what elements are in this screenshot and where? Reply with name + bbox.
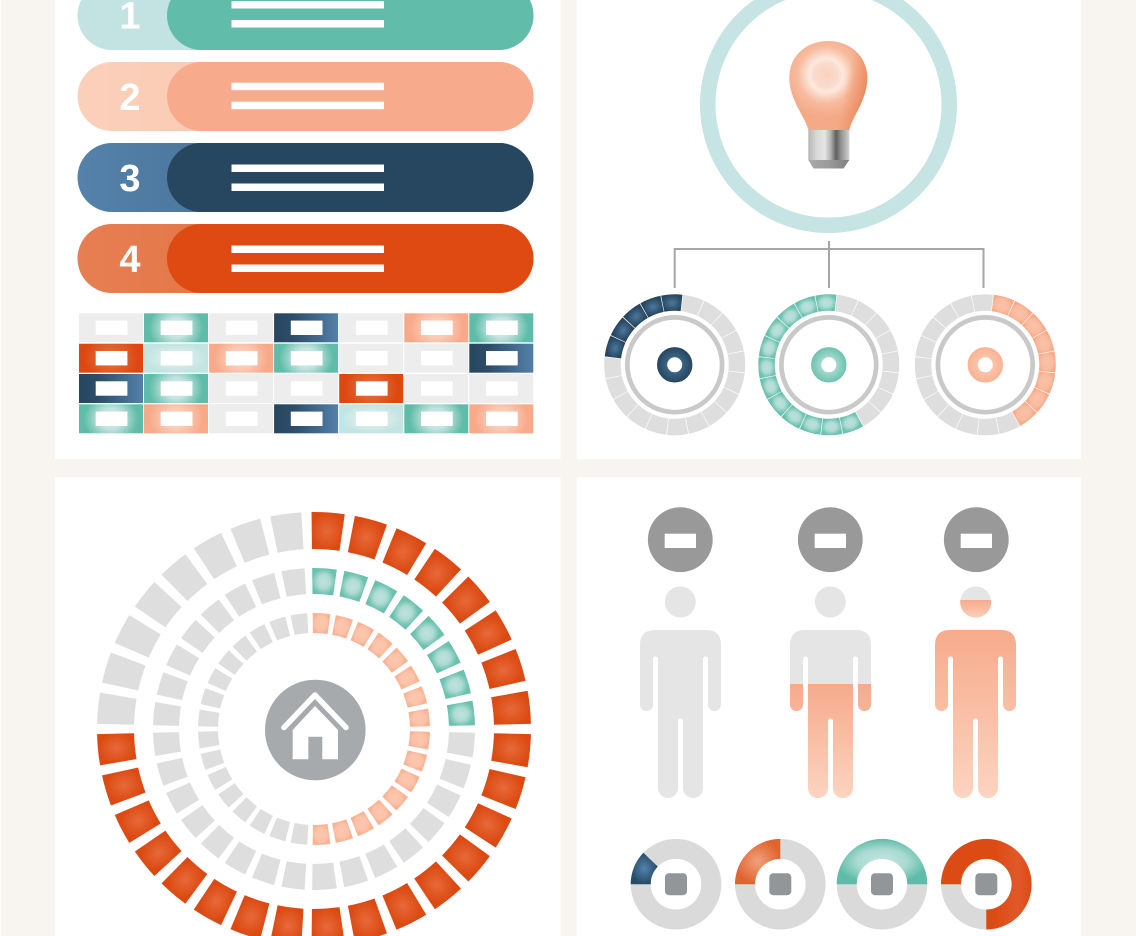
- pill 4: [78, 224, 534, 293]
- badge 1: [648, 507, 713, 572]
- panel: people and donuts: [577, 478, 1081, 936]
- person 1: empty: [640, 586, 721, 798]
- panel: concentric home rings: [55, 478, 560, 936]
- donut 4: orange three quarters: [941, 839, 1032, 930]
- pill 2: 2: [119, 77, 141, 119]
- pill 4: 4: [119, 239, 141, 281]
- person 2: half filled: [790, 586, 871, 798]
- panel: numbered list and colour grid: [55, 0, 560, 459]
- middle ring: [153, 568, 475, 890]
- donut 3: teal half: [837, 839, 927, 920]
- large pale ring around bulb: [708, 0, 949, 225]
- ring gauge: teal: [758, 294, 900, 436]
- icon: light bulb: [789, 41, 867, 168]
- connector lines: [675, 241, 984, 288]
- pill 3: [78, 143, 534, 212]
- donut 1: navy: [631, 849, 711, 920]
- ring gauge: navy: [604, 294, 746, 436]
- panel: light bulb and ring gauges: [577, 0, 1081, 459]
- person 3: nearly full: [935, 586, 1016, 798]
- badge 3: [944, 507, 1009, 572]
- outer ring: [96, 511, 532, 936]
- pill 2: [78, 62, 534, 131]
- pill 1: [78, 0, 534, 50]
- inner ring: [198, 613, 430, 845]
- icon: house in grey circle: [265, 680, 366, 780]
- badge 2: [798, 507, 863, 572]
- colour block grid: [79, 313, 533, 433]
- pill 3: 3: [119, 158, 141, 200]
- ring gauge: salmon: [914, 294, 1056, 436]
- donut 2: orange quarter: [735, 839, 816, 920]
